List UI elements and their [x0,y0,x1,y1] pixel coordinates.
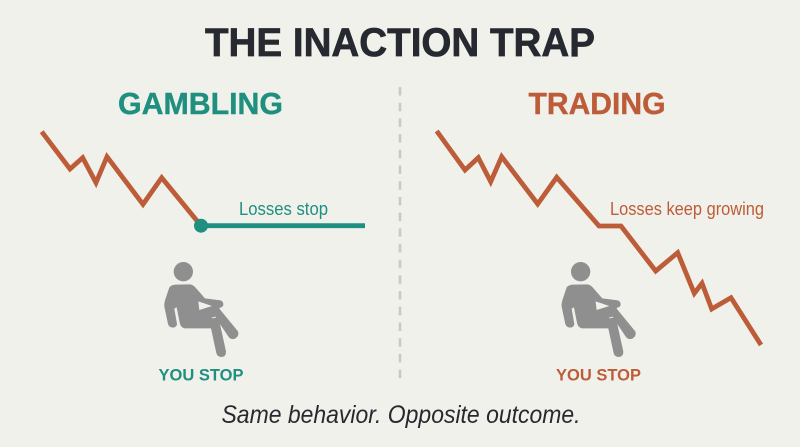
chart: gambling losses stop [42,132,365,233]
tagline: Same behavior. Opposite outcome. [222,401,580,429]
label: losses keep growing: Losses keep growing [610,199,764,219]
chart: trading losses grow [437,131,761,345]
heading: trading: TRADING [528,86,666,121]
label: losses stop: Losses stop [239,199,328,219]
icon: seated person, trading [562,262,636,357]
title: THE INACTION TRAP [205,21,595,65]
icon: seated person, gambling [164,262,238,357]
heading: gambling: GAMBLING [118,86,283,121]
label: you stop, gambling: YOU STOP [158,366,244,384]
label: you stop, trading: YOU STOP [556,366,641,384]
